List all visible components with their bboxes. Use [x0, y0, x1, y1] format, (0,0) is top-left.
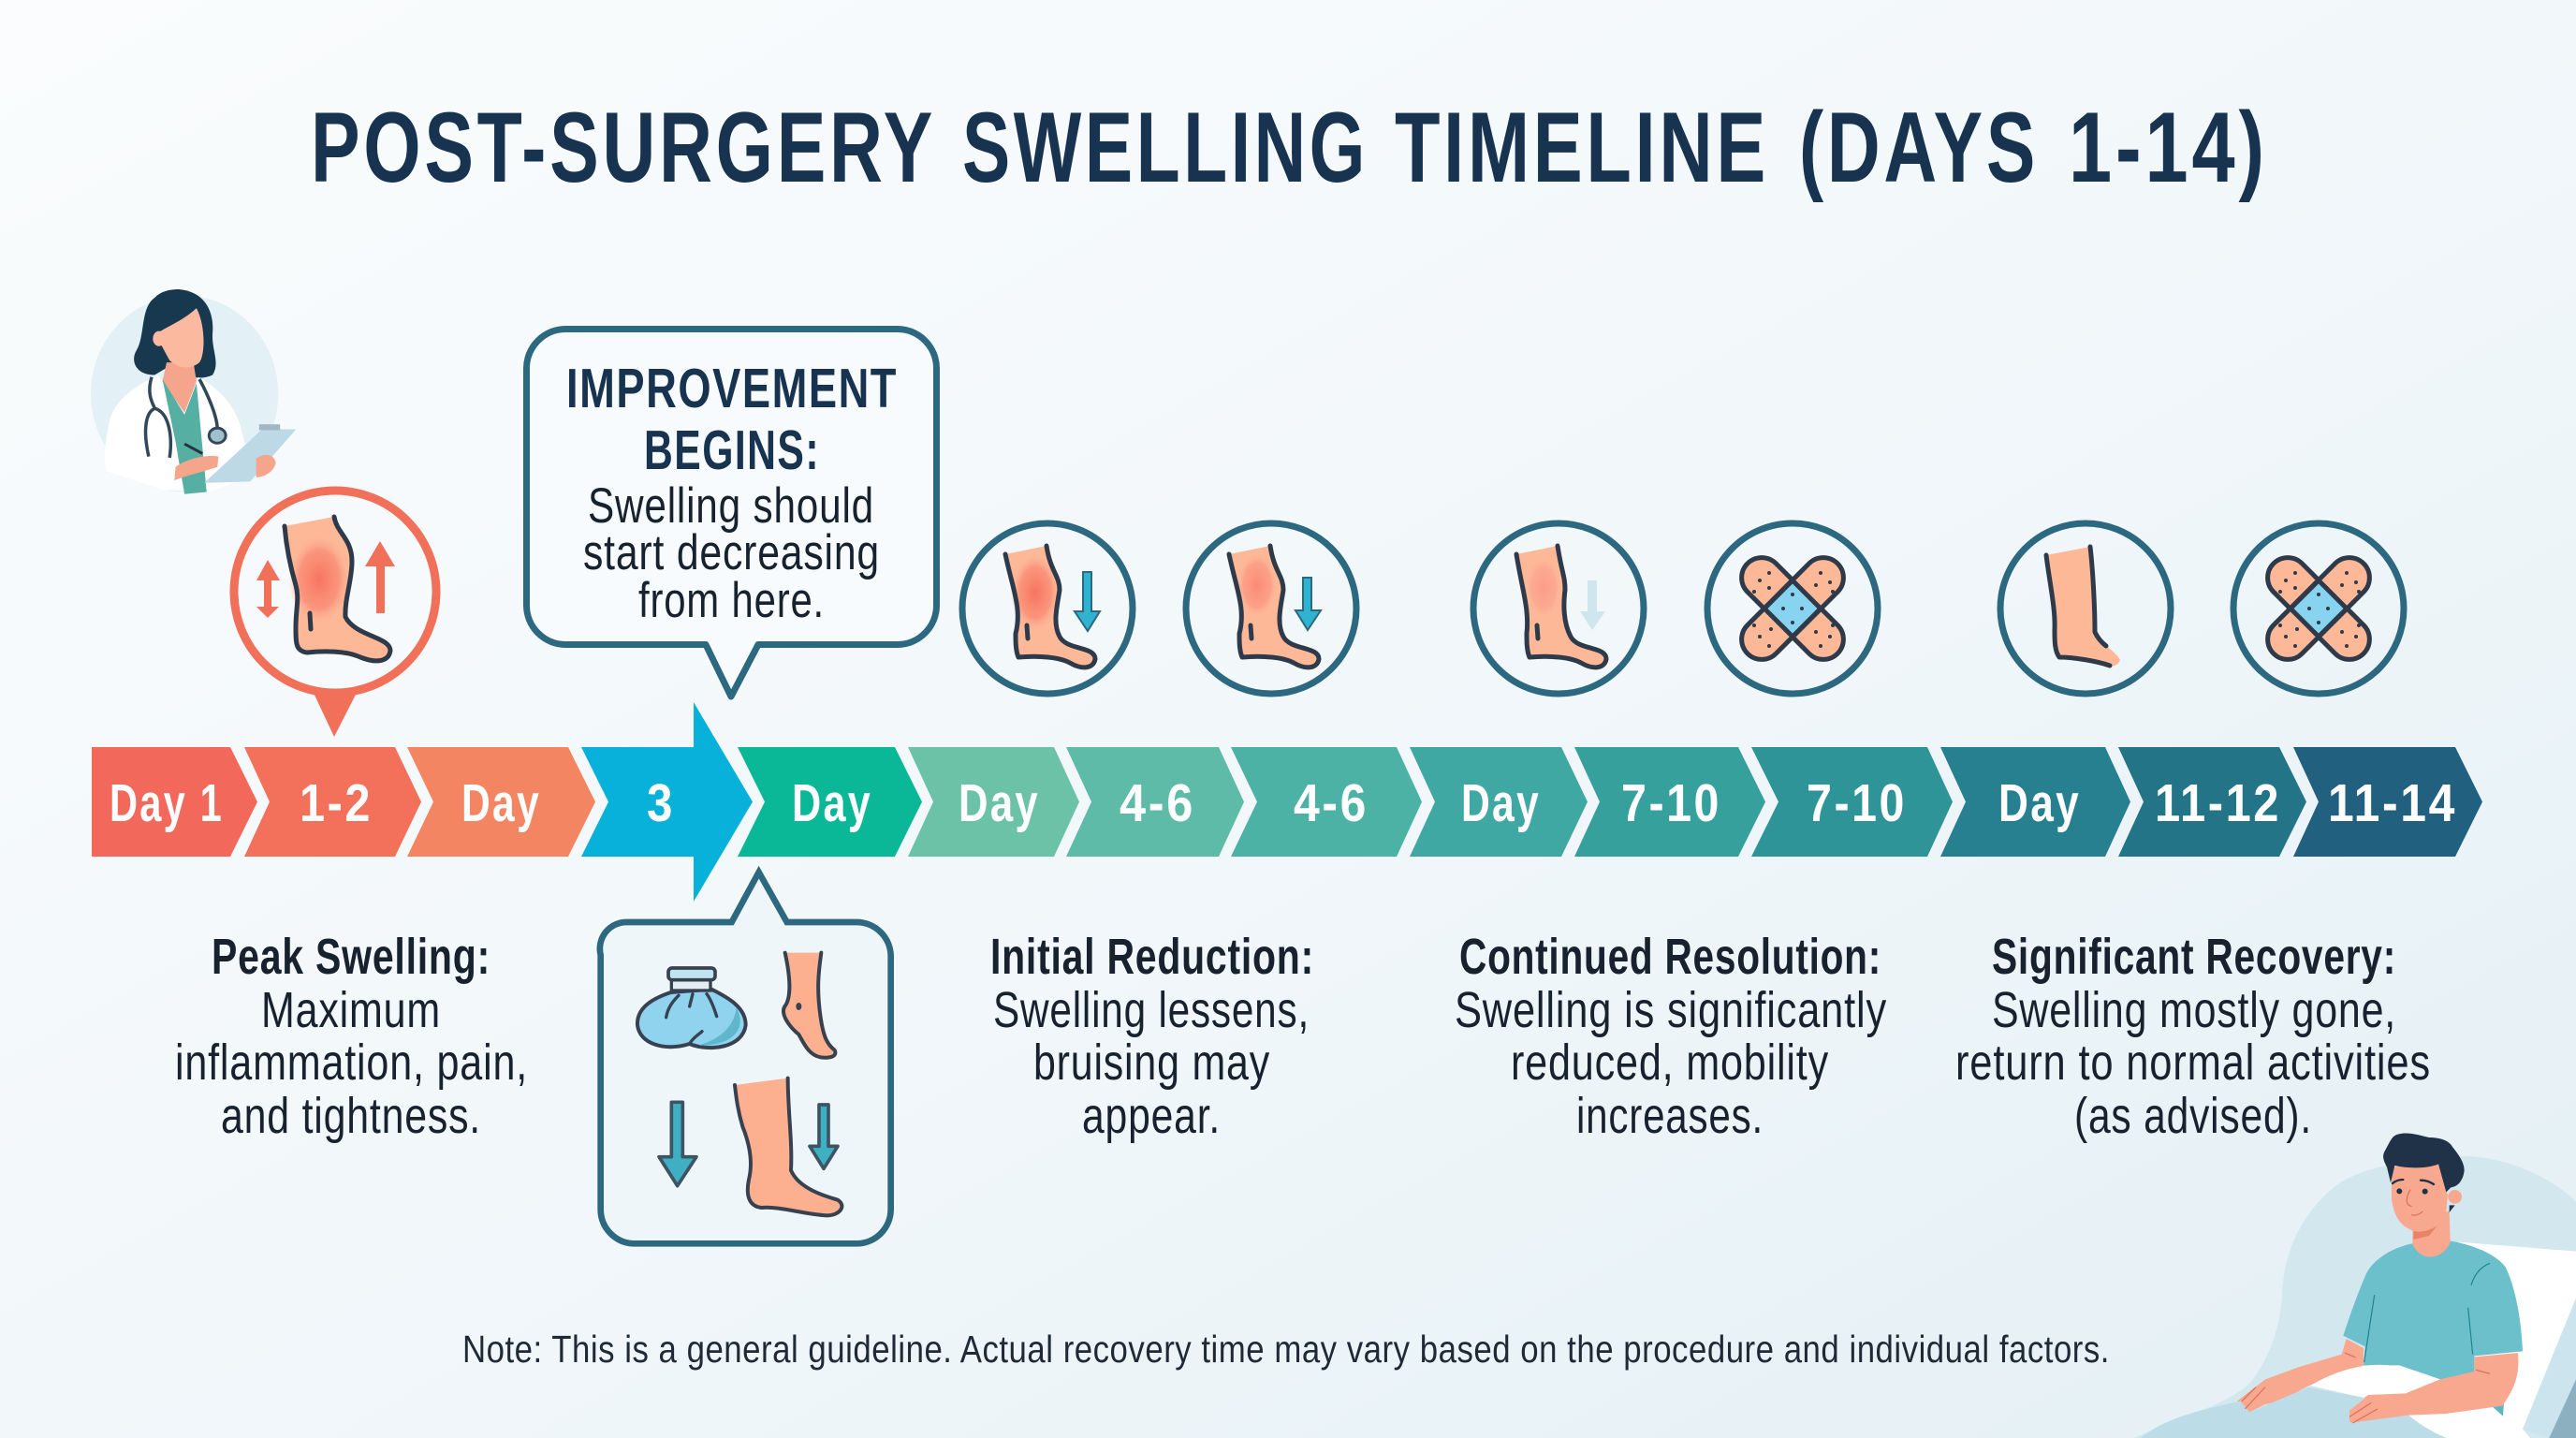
- segment: day: Day: [959, 773, 1040, 833]
- note: Note: This is a general guideline. Actual recovery time may vary based on the procedure and individual factors.: [462, 1328, 2110, 1371]
- panel: care icons: [600, 873, 891, 1243]
- text block: initial reduction: appear.: [1082, 1088, 1221, 1144]
- text block: continued resolution: reduced, mobility: [1511, 1034, 1829, 1091]
- segment: 11-12: [2118, 747, 2306, 857]
- title: SWELLING: [962, 91, 1368, 203]
- icon: leg with reduced swelling, light: [1473, 523, 1644, 694]
- text block: peak swelling: and tightness.: [221, 1088, 481, 1144]
- text block: peak swelling: Peak Swelling:: [212, 929, 490, 985]
- callout: improvement begins: [526, 330, 936, 697]
- text block: continued resolution: increases.: [1576, 1088, 1764, 1144]
- icon: bandage: [1707, 523, 1878, 694]
- title: POST-SURGERY: [311, 91, 936, 203]
- segment: day: Day: [792, 773, 872, 833]
- title: TIMELINE: [1395, 91, 1769, 203]
- segment: 7-10: 7-10: [1621, 773, 1721, 833]
- segment: day 1: [92, 747, 257, 857]
- text block: peak swelling: inflammation, pain,: [175, 1034, 528, 1091]
- callout: improvement begins: BEGINS:: [644, 419, 820, 481]
- illustration: patient in bed: [2134, 1134, 2576, 1438]
- text block: continued resolution: [1455, 929, 1887, 1144]
- callout: improvement begins: from here.: [638, 573, 825, 628]
- text block: significant recovery: return to normal activities: [1955, 1034, 2431, 1091]
- segment: day: Day: [1461, 773, 1541, 833]
- segment: 3 large arrow: 3: [647, 773, 675, 833]
- text block: significant recovery: Swelling mostly gone,: [1992, 982, 2396, 1038]
- text block: initial reduction: bruising may: [1033, 1034, 1270, 1091]
- segment: 11-12: 11-12: [2155, 773, 2281, 833]
- segment: 1-2: 1-2: [300, 773, 373, 833]
- text block: initial reduction: Initial Reduction:: [990, 929, 1314, 985]
- segment: 1-2: [244, 747, 421, 857]
- segment: day: Day: [1998, 773, 2081, 833]
- segment: 11-14: 11-14: [2328, 773, 2457, 833]
- segment: 7-10: 7-10: [1807, 773, 1907, 833]
- segment: 3 large arrow: [581, 702, 753, 902]
- segment: 7-10: [1574, 747, 1765, 857]
- icon: healed leg: [2000, 523, 2171, 694]
- segment: 7-10: [1751, 747, 1953, 857]
- segment: 11-14: [2293, 747, 2482, 857]
- segment: 4-6: [1231, 747, 1422, 857]
- icon: leg with reduced swelling, medium: [1186, 523, 1356, 694]
- text block: significant recovery: Significant Recovery:: [1992, 929, 2396, 985]
- text block: continued resolution: Swelling is significantly: [1455, 982, 1887, 1038]
- callout: improvement begins: start decreasing: [583, 525, 880, 580]
- segment: day 1: Day 1: [110, 773, 224, 833]
- segment: day: [738, 747, 922, 857]
- icon: leg with reduced swelling, strong: [962, 523, 1133, 694]
- text block: continued resolution: Continued Resolution:: [1459, 929, 1881, 985]
- segment: day: Day: [461, 773, 541, 833]
- text block: peak swelling: Maximum: [261, 982, 441, 1038]
- callout: improvement begins: IMPROVEMENT: [566, 358, 898, 419]
- text block: initial reduction: Swelling lessens,: [993, 982, 1310, 1038]
- segment: day: [1410, 747, 1588, 857]
- segment: 4-6: 4-6: [1120, 773, 1195, 833]
- title: [311, 91, 2268, 203]
- icon: peak swelling pin: [234, 491, 436, 737]
- text block: initial reduction: [990, 929, 1314, 1144]
- text block: significant recovery: (as advised).: [2074, 1088, 2312, 1144]
- title: (DAYS: [1799, 91, 2039, 203]
- timeline arrow bar: [92, 702, 2482, 902]
- title: 1-14): [2069, 91, 2268, 203]
- segment: 4-6: 4-6: [1294, 773, 1368, 833]
- text block: peak swelling: [175, 929, 528, 1144]
- segment: 4-6: [1066, 747, 1244, 857]
- icon: bandage, second: [2233, 523, 2404, 694]
- text block: significant recovery: [1955, 929, 2431, 1144]
- segment: day: [407, 747, 595, 857]
- callout: improvement begins: Swelling should: [588, 478, 874, 534]
- illustration: doctor with clipboard: [91, 289, 296, 494]
- segment: day: [908, 747, 1079, 857]
- segment: day: [1940, 747, 2130, 857]
